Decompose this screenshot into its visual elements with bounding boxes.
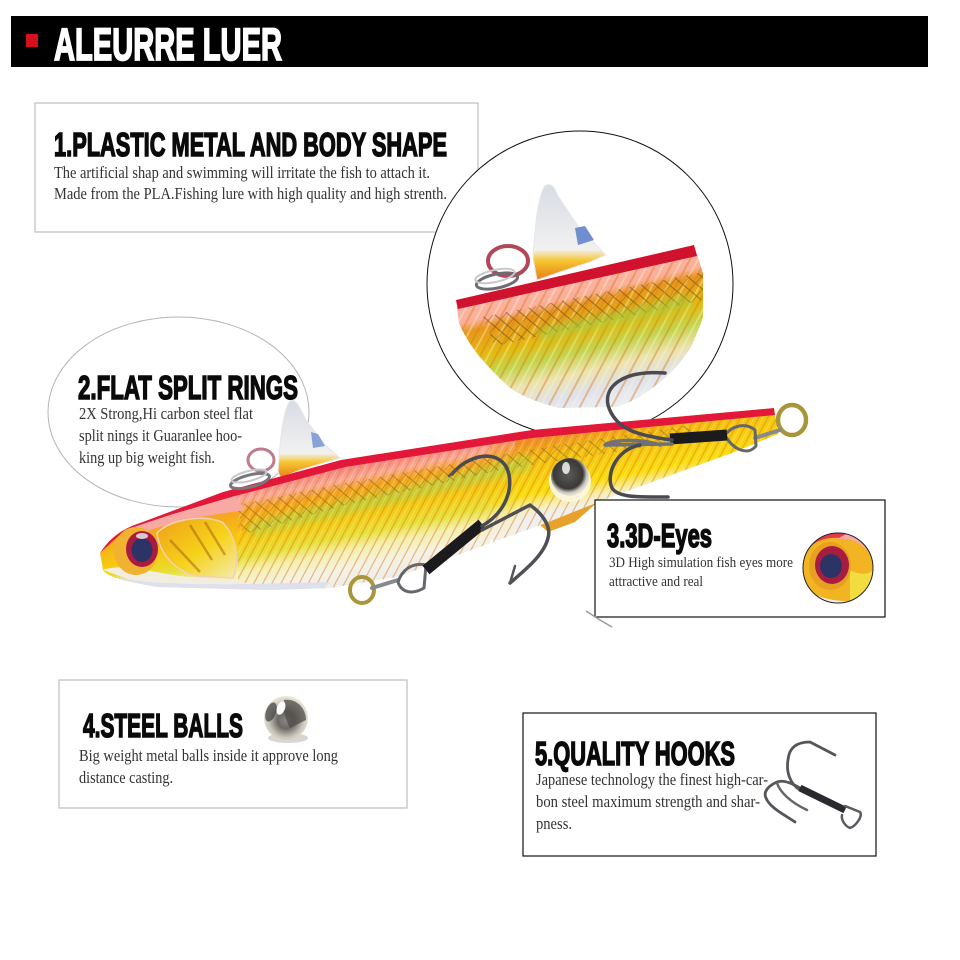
panel 4: steel balls: Big weight metal balls inside it approve long	[79, 746, 338, 765]
panel 1: plastic metal and body shape: The artificial shap and swimming will irritate the fish to attach it.	[54, 163, 430, 182]
panel 3: 3D eyes: 3.3D-Eyes	[607, 517, 712, 554]
icon: steel ball	[263, 696, 308, 743]
pelvic orange fin	[540, 500, 600, 532]
inset lure body	[456, 245, 703, 408]
panel 3: 3D eyes: 3D High simulation fish eyes more	[609, 555, 793, 571]
panel 3: 3D eyes: attractive and real	[609, 574, 703, 590]
inset fin blue spot	[575, 226, 594, 245]
head and top red stripe	[100, 408, 775, 553]
steel ball	[549, 458, 591, 502]
panel 5: quality hooks: bon steel maximum strength and shar-	[536, 792, 760, 811]
header banner	[11, 16, 928, 70]
eye	[114, 527, 158, 575]
header banner: ALEURRE LUER	[54, 19, 282, 70]
body	[100, 408, 778, 590]
chin	[103, 567, 270, 590]
rear treble hook	[605, 373, 806, 497]
panel 3: 3D eyes	[595, 500, 885, 617]
gill cover	[157, 518, 236, 578]
inset split ring	[474, 246, 528, 292]
panel 2: flat split rings	[48, 317, 309, 507]
main lure	[90, 373, 806, 603]
panel 1: plastic metal and body shape: 1.PLASTIC METAL AND BODY SHAPE	[54, 126, 447, 163]
panel 2: flat split rings: 2.FLAT SPLIT RINGS	[78, 369, 298, 406]
split ring on fin	[229, 449, 274, 492]
icon: treble hook	[765, 742, 861, 828]
panel 4: steel balls: 4.STEEL BALLS	[83, 707, 243, 744]
inset fin	[533, 184, 606, 280]
panel 1: plastic metal and body shape: Made from the PLA.Fishing lure with high quality and high strenth.	[54, 184, 447, 203]
panel 2: flat split rings: split nings it Guaranlee hoo-	[79, 426, 242, 445]
panel 2: flat split rings: king up big weight fish.	[79, 448, 215, 467]
panel 2: flat split rings: 2X Strong,Hi carbon steel flat	[79, 404, 253, 423]
panel 5: quality hooks: Japanese technology the finest high-car-	[536, 770, 768, 789]
stray hook tip below panel 3	[586, 611, 612, 627]
front treble hook	[350, 456, 549, 603]
magnified circle: dorsal fin and scales	[427, 131, 733, 437]
icon: fish eye	[804, 534, 872, 602]
panel 1: plastic metal and body shape	[35, 103, 478, 232]
panel 5: quality hooks	[523, 713, 876, 856]
panel 4: steel balls: distance casting.	[79, 768, 173, 787]
dorsal fin	[278, 400, 340, 478]
icon: fish eye ring	[803, 533, 873, 603]
fin blue mark	[311, 432, 325, 448]
panel 5: quality hooks: 5.QUALITY HOOKS	[535, 735, 735, 772]
panel 4: steel balls	[59, 680, 407, 808]
panel 5: quality hooks: pness.	[536, 814, 572, 833]
